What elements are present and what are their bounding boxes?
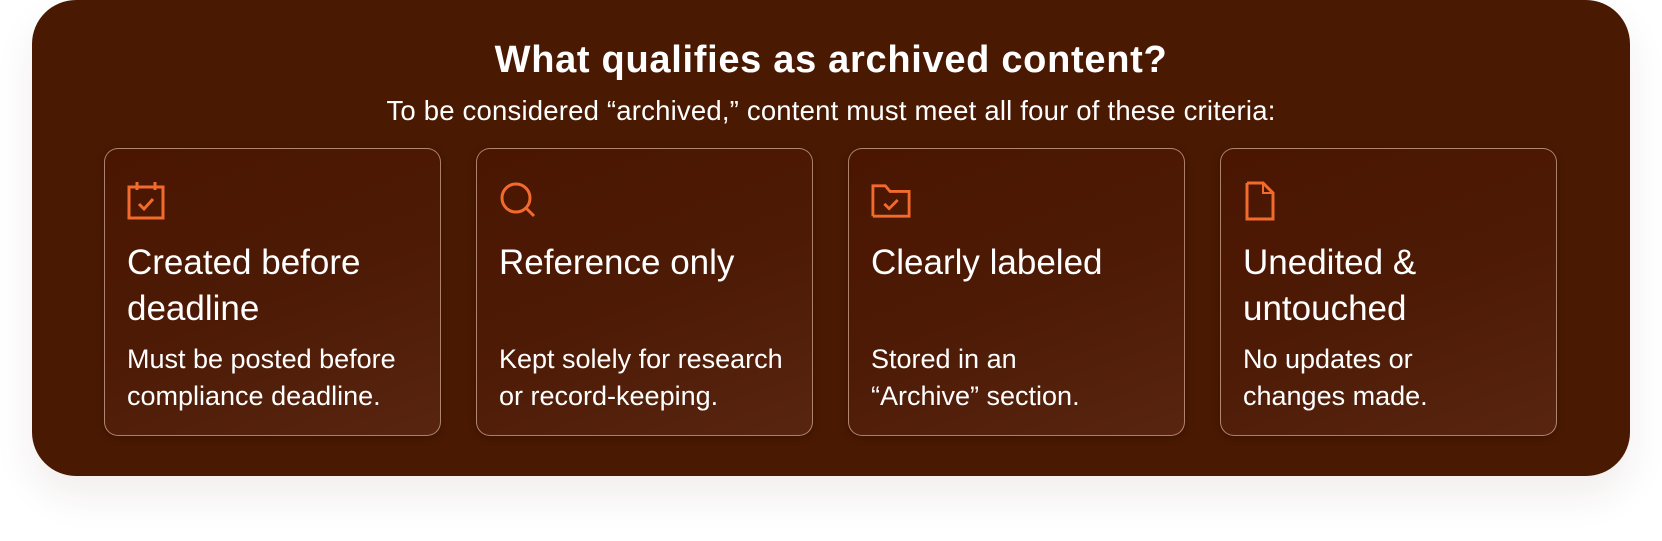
heading: untouched bbox=[1243, 289, 1406, 328]
description: “Archive” section. bbox=[871, 381, 1080, 411]
subtitle: To be considered “archived,” content must meet all four of these criteria: bbox=[386, 95, 1276, 126]
heading: Created before bbox=[127, 243, 360, 282]
description bbox=[499, 344, 783, 411]
heading bbox=[1243, 243, 1416, 328]
heading bbox=[127, 243, 360, 328]
card: unedited bbox=[1220, 148, 1557, 436]
description: or record-keeping. bbox=[499, 381, 718, 411]
card: created before deadline bbox=[104, 148, 441, 436]
description bbox=[871, 344, 1080, 411]
icon: magnifier bbox=[500, 182, 535, 217]
card: reference only bbox=[476, 148, 813, 436]
heading: Unedited & bbox=[1243, 243, 1416, 282]
description bbox=[127, 344, 396, 411]
description: changes made. bbox=[1243, 381, 1428, 411]
title: What qualifies as archived content? bbox=[495, 39, 1167, 81]
icon: folder check bbox=[871, 184, 910, 218]
description: Must be posted before bbox=[127, 344, 396, 374]
description: Stored in an bbox=[871, 344, 1017, 374]
description: Kept solely for research bbox=[499, 344, 783, 374]
card: clearly labeled bbox=[848, 148, 1185, 436]
heading: Clearly labeled bbox=[871, 243, 1103, 282]
description: compliance deadline. bbox=[127, 381, 381, 411]
description: No updates or bbox=[1243, 344, 1413, 374]
heading: Reference only bbox=[499, 243, 734, 282]
heading: deadline bbox=[127, 289, 259, 328]
icon: document bbox=[1246, 182, 1274, 220]
icon: calendar check bbox=[128, 182, 164, 220]
description bbox=[1243, 344, 1428, 411]
